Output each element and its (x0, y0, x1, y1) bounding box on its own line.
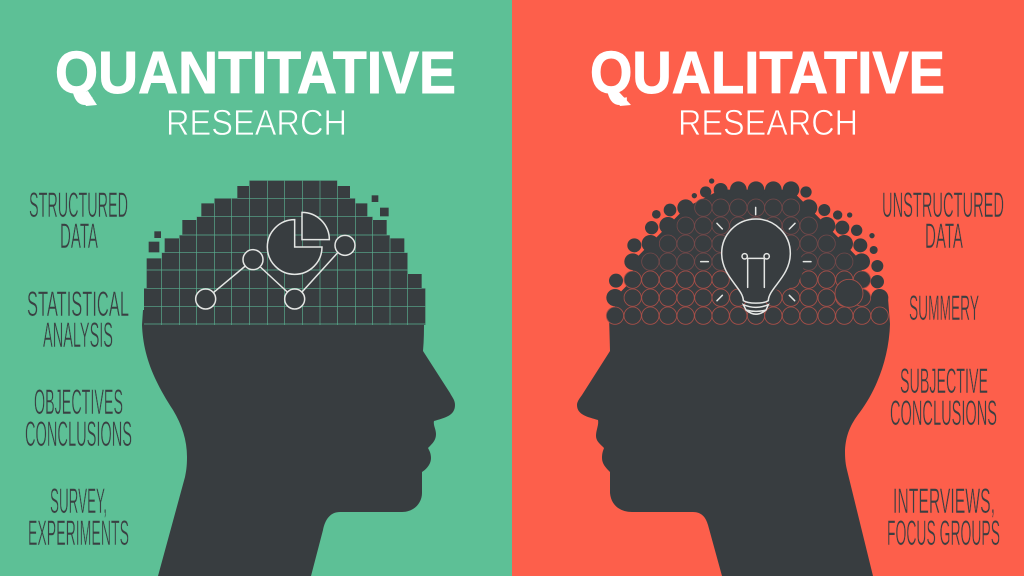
text: OBJECTIVES (34, 382, 123, 422)
head silhouette: qualitative (577, 298, 890, 576)
bulb glass (722, 219, 790, 303)
bulb halo (757, 243, 803, 290)
icon: pie chart (267, 212, 329, 274)
circle cluster upper rows (642, 199, 853, 270)
text: EXPERIMENTS (28, 513, 129, 553)
loose pixels (149, 195, 389, 252)
text block: statistical analysis (27, 284, 129, 355)
text: STRUCTURED (29, 185, 128, 225)
subheading: quantitative research: RESEARCH (166, 102, 347, 143)
heading: qualitative: QUALITATIVE (590, 40, 945, 106)
head silhouette: quantitative (142, 310, 455, 576)
heading: quantitative: QUANTITATIVE (55, 40, 456, 106)
brain: circles with light bulb (606, 178, 888, 324)
text: CONCLUSIONS (25, 414, 132, 454)
subheading: qualitative research: RESEARCH (678, 102, 858, 143)
text block: statistical analysis: ANALYSIS (43, 315, 113, 355)
large circle (835, 279, 863, 307)
text block: structured data (29, 185, 128, 256)
text block: survey, experiments (28, 481, 129, 553)
brain: pixel grid with charts (144, 180, 426, 325)
text block: unstructured data: DATA (925, 216, 963, 256)
text block: structured data: DATA (60, 216, 98, 256)
icon: line chart (196, 235, 355, 309)
pixel dome (144, 181, 425, 325)
circle cluster lower rows (606, 271, 888, 324)
icon: light bulb (701, 207, 811, 314)
panel: quantitative background (0, 0, 512, 576)
text: STATISTICAL (27, 284, 129, 324)
text block: unstructured data (882, 185, 1004, 256)
text block: survey, experiments: SURVEY, (50, 481, 107, 521)
filament (748, 258, 764, 287)
text block: subjective conclusions (890, 361, 997, 433)
rays (701, 207, 811, 301)
bulb base (743, 305, 768, 314)
panel: qualitative background (512, 0, 1024, 576)
dome fill (615, 190, 880, 324)
text block: interviews, focus groups (887, 481, 1000, 553)
outer solid circles (606, 178, 888, 306)
text block: objectives conclusions (25, 382, 132, 454)
